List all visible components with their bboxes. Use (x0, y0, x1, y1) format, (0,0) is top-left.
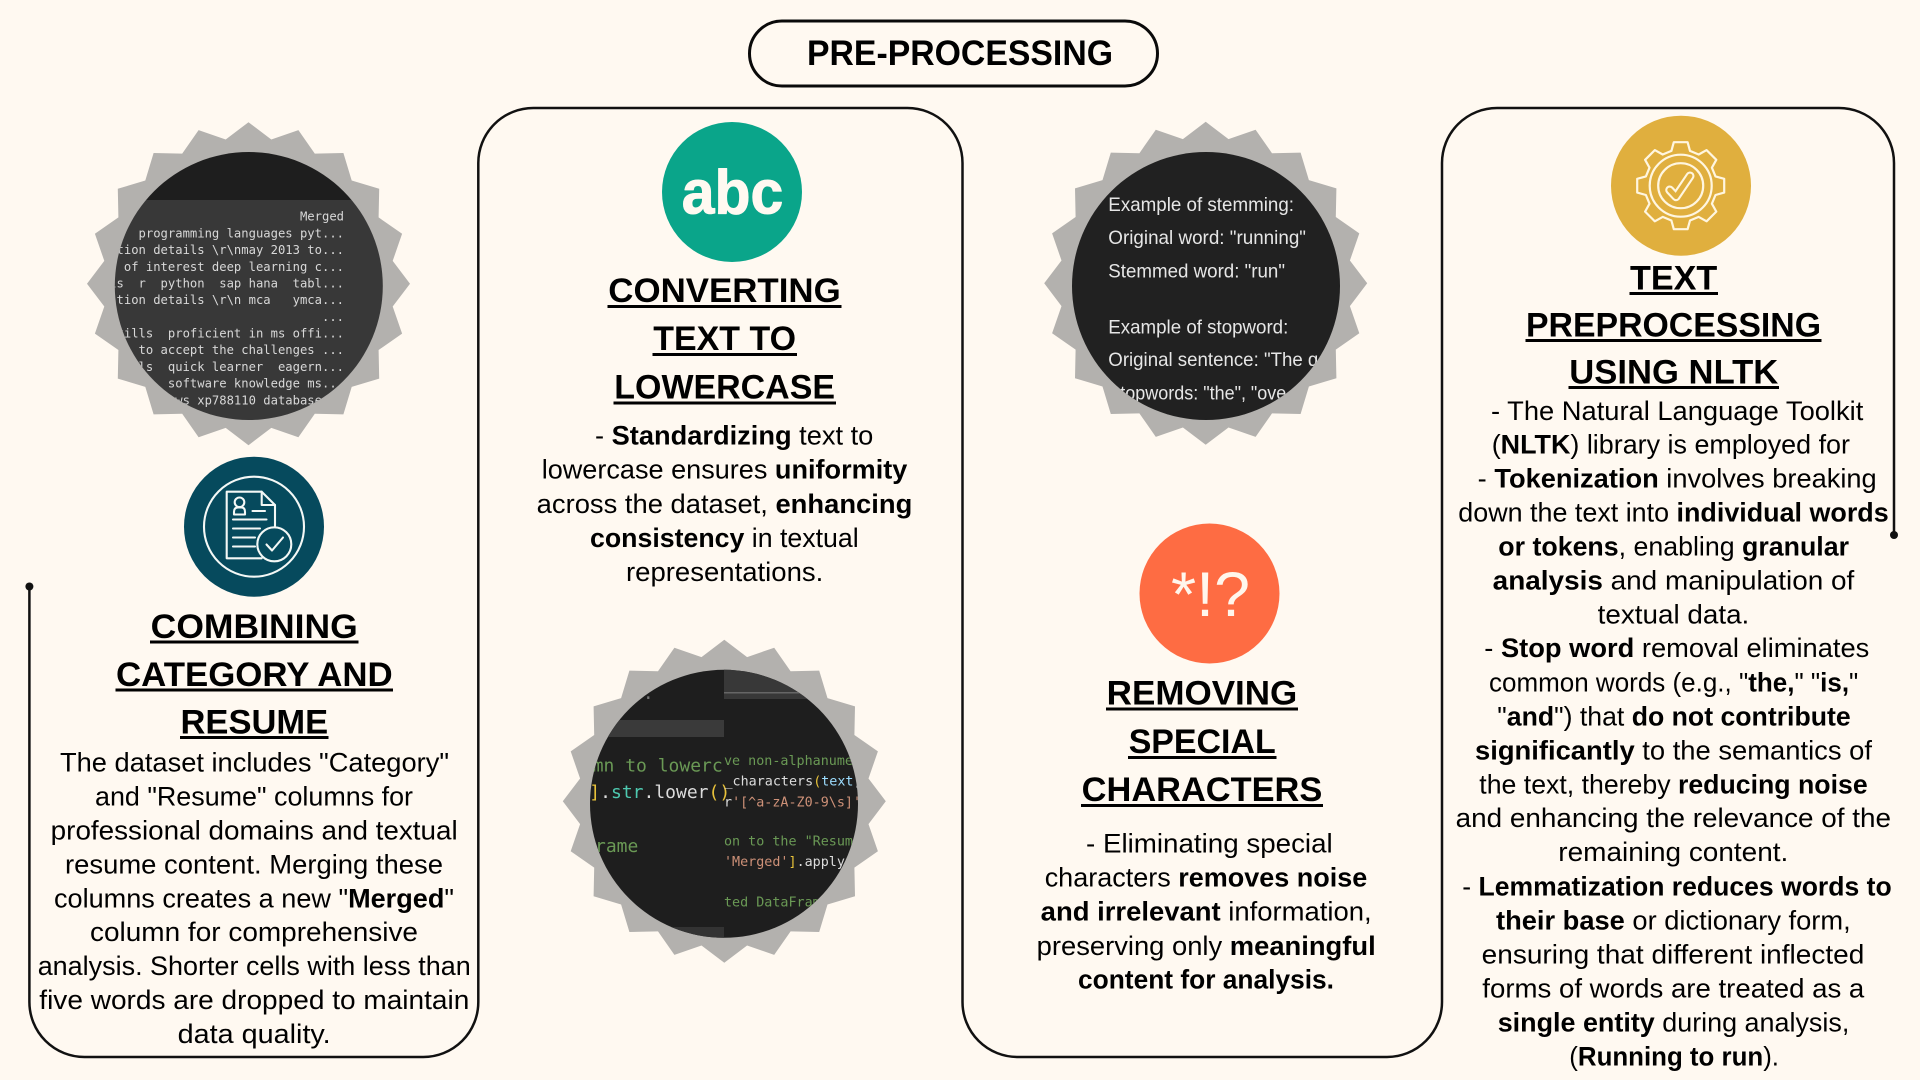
image badge: merged dataframe output: windows xp788110 database... (139, 393, 344, 407)
image badge: lowercase code snippet: mn to lowerc (593, 756, 723, 777)
text block: combining description: columns creates a new "Merged" (54, 883, 454, 913)
text block: lowercase description: representations. (626, 557, 823, 587)
panel: combining category and resume (38, 122, 471, 1049)
text block: special characters description: and irrelevant information, (1041, 897, 1372, 927)
heading: combining category and resume: CATEGORY AND (116, 656, 393, 694)
image badge: merged dataframe output: Merged (300, 210, 344, 224)
text block: nltk description: (NLTK) library is employed for (1492, 430, 1850, 460)
text block: nltk description: analysis and manipulation of (1493, 565, 1855, 595)
image badge: lowercase code snippet: ted DataFrame (724, 896, 829, 911)
text block: combining description: professional domains and textual (51, 816, 458, 846)
image badge: merged dataframe output: skills r python sap hana tabl... (80, 276, 344, 290)
text block: nltk description: - Stop word removal eliminates (1484, 633, 1869, 663)
panel: text preprocessing using nltk (1456, 116, 1892, 1071)
text block: nltk description: - Lemmatization reduces words to (1462, 871, 1892, 901)
heading: converting text to lowercase: CONVERTING (608, 272, 841, 310)
text block: combining description: and "Resume" columns for (95, 782, 413, 812)
heading: text preprocessing using nltk (1526, 260, 1822, 392)
image badge: merged dataframe output: skills quick learner eagern... (109, 360, 344, 374)
text block: nltk description: forms of words are treated as a (1482, 974, 1865, 1004)
heading: removing special characters: SPECIAL (1129, 723, 1276, 761)
image badge: stemming and stopword examples: Example of stemming: (1108, 194, 1294, 216)
icon: abc: abc (682, 158, 783, 227)
text block: special characters description: preserving only meaningful (1037, 931, 1376, 961)
text block: nltk description: significantly to the semantics of (1475, 735, 1872, 765)
text block: combining description: resume content. Merging these (65, 849, 443, 879)
text block: nltk description: common words (e.g., "the," "is," (1489, 668, 1858, 698)
heading: text preprocessing using nltk: USING NLTK (1569, 354, 1779, 392)
text block: special characters description (1037, 829, 1376, 995)
text block: lowercase description: consistency in textual (590, 523, 859, 553)
image badge: lowercase code snippet: ve non-alphanumeric (724, 754, 877, 769)
image badge: lowercase code snippet: .. (632, 683, 654, 704)
panel: removing special characters (1037, 122, 1376, 995)
image badge: merged dataframe output: ... (322, 310, 344, 324)
text block: nltk description: down the text into individual words (1458, 498, 1889, 528)
image badge: stemming and stopword examples: Original sentence: "The q (1108, 349, 1318, 371)
heading: removing special characters: CHARACTERS (1082, 771, 1322, 809)
heading: combining category and resume (116, 608, 393, 742)
image badge: lowercase code snippet: on to the "Resume" (724, 835, 869, 850)
heading: text preprocessing using nltk: TEXT (1630, 260, 1718, 298)
image badge: merged dataframe output: programming languages pyt... (139, 226, 344, 240)
image badge: stemming and stopword examples: Stemmed word: "run" (1108, 260, 1285, 282)
text block: combining description: The dataset includes "Category" (60, 748, 449, 778)
icon: special characters (1140, 524, 1280, 664)
image badge: lowercase code snippet: ].str.lower() (589, 782, 730, 803)
image badge: lowercase code snippet: 'Merged'].apply (724, 855, 845, 870)
title (750, 21, 1158, 86)
heading: converting text to lowercase: TEXT TO (653, 320, 796, 358)
heading: removing special characters: REMOVING (1107, 675, 1297, 713)
text block: nltk description: the text, thereby reducing noise (1479, 769, 1868, 799)
text block: nltk description: remaining content. (1558, 837, 1788, 867)
text block: nltk description: textual data. (1598, 599, 1749, 629)
icon: special characters: *!? (1171, 560, 1250, 630)
image badge: merged dataframe output: areas of interest deep learning c... (80, 260, 344, 274)
text block: lowercase description: - Standardizing text to (595, 420, 873, 450)
title: PRE-PROCESSING (807, 34, 1113, 73)
image badge: lowercase code snippet: r'[^a-zA-Z0-9\s]' (724, 796, 861, 811)
heading: removing special characters (1081, 675, 1323, 809)
image badge: stemming and stopword examples: Example of stopword: (1108, 316, 1288, 338)
text block: nltk description: - Tokenization involves breaking (1478, 464, 1877, 494)
image badge: merged dataframe output: cation details \r\nmay 2013 to... (102, 243, 344, 257)
image badge: lowercase code snippet: _characters(text, (724, 775, 862, 790)
text block: combining description (38, 748, 471, 1049)
image badge: merged dataframe output: education details \r\n mca ymca... (80, 293, 344, 307)
heading: combining category and resume: RESUME (180, 704, 328, 742)
image badge: stemming and stopword examples (1044, 122, 1367, 445)
image badge: stemming and stopword examples: Original word: "running" (1108, 227, 1306, 249)
image badge: lowercase code snippet: rame (595, 836, 638, 857)
text block: nltk description: - The Natural Language Toolkit (1491, 396, 1864, 426)
image badge: stemming and stopword examples: Stopwords: "the", "ove (1108, 382, 1286, 404)
text block: nltk description: (Running to run). (1569, 1041, 1779, 1071)
image badge: merged dataframe output (87, 122, 410, 446)
text block: special characters description: - Eliminating special (1086, 829, 1333, 859)
heading: text preprocessing using nltk: PREPROCESSING (1526, 306, 1821, 344)
text block: lowercase description: across the dataset, enhancing (537, 489, 912, 519)
heading: converting text to lowercase: LOWERCASE (614, 368, 835, 406)
text block: special characters description: characters removes noise (1045, 863, 1367, 893)
text block: nltk description: ensuring that different inflected (1482, 939, 1864, 969)
text block: combining description: analysis. Shorter cells with less than (38, 951, 471, 981)
icon: resume document with check (184, 457, 324, 597)
heading: converting text to lowercase (608, 272, 842, 406)
text block: special characters description: content for analysis. (1078, 965, 1334, 995)
icon: abc (662, 122, 802, 262)
text block: lowercase description: lowercase ensures uniformity (542, 455, 907, 485)
text block: combining description: five words are dropped to maintain (39, 985, 469, 1015)
text block: nltk description: or tokens, enabling granular (1498, 531, 1849, 561)
text block: nltk description: their base or dictionary form, (1496, 905, 1851, 935)
text block: nltk description (1456, 396, 1892, 1071)
text block: nltk description: and enhancing the relevance of the (1456, 803, 1891, 833)
image badge: merged dataframe output: computer skills proficient in ms offi... (43, 326, 344, 340)
panel: converting text to lowercase (537, 122, 912, 963)
image badge: merged dataframe output: willingness to accept the challenges ... (50, 343, 344, 357)
text block: nltk description: "and") that do not contribute (1497, 701, 1851, 731)
icon: gear with check (1611, 116, 1751, 256)
text block: combining description: column for comprehensive (90, 917, 418, 947)
text block: combining description: data quality. (178, 1019, 331, 1049)
text block: nltk description: single entity during analysis, (1498, 1008, 1849, 1038)
image badge: merged dataframe output: software knowledge ms... (168, 377, 344, 391)
text block: lowercase description (537, 420, 912, 587)
image badge: lowercase code snippet (563, 640, 886, 963)
heading: combining category and resume: COMBINING (151, 608, 358, 646)
